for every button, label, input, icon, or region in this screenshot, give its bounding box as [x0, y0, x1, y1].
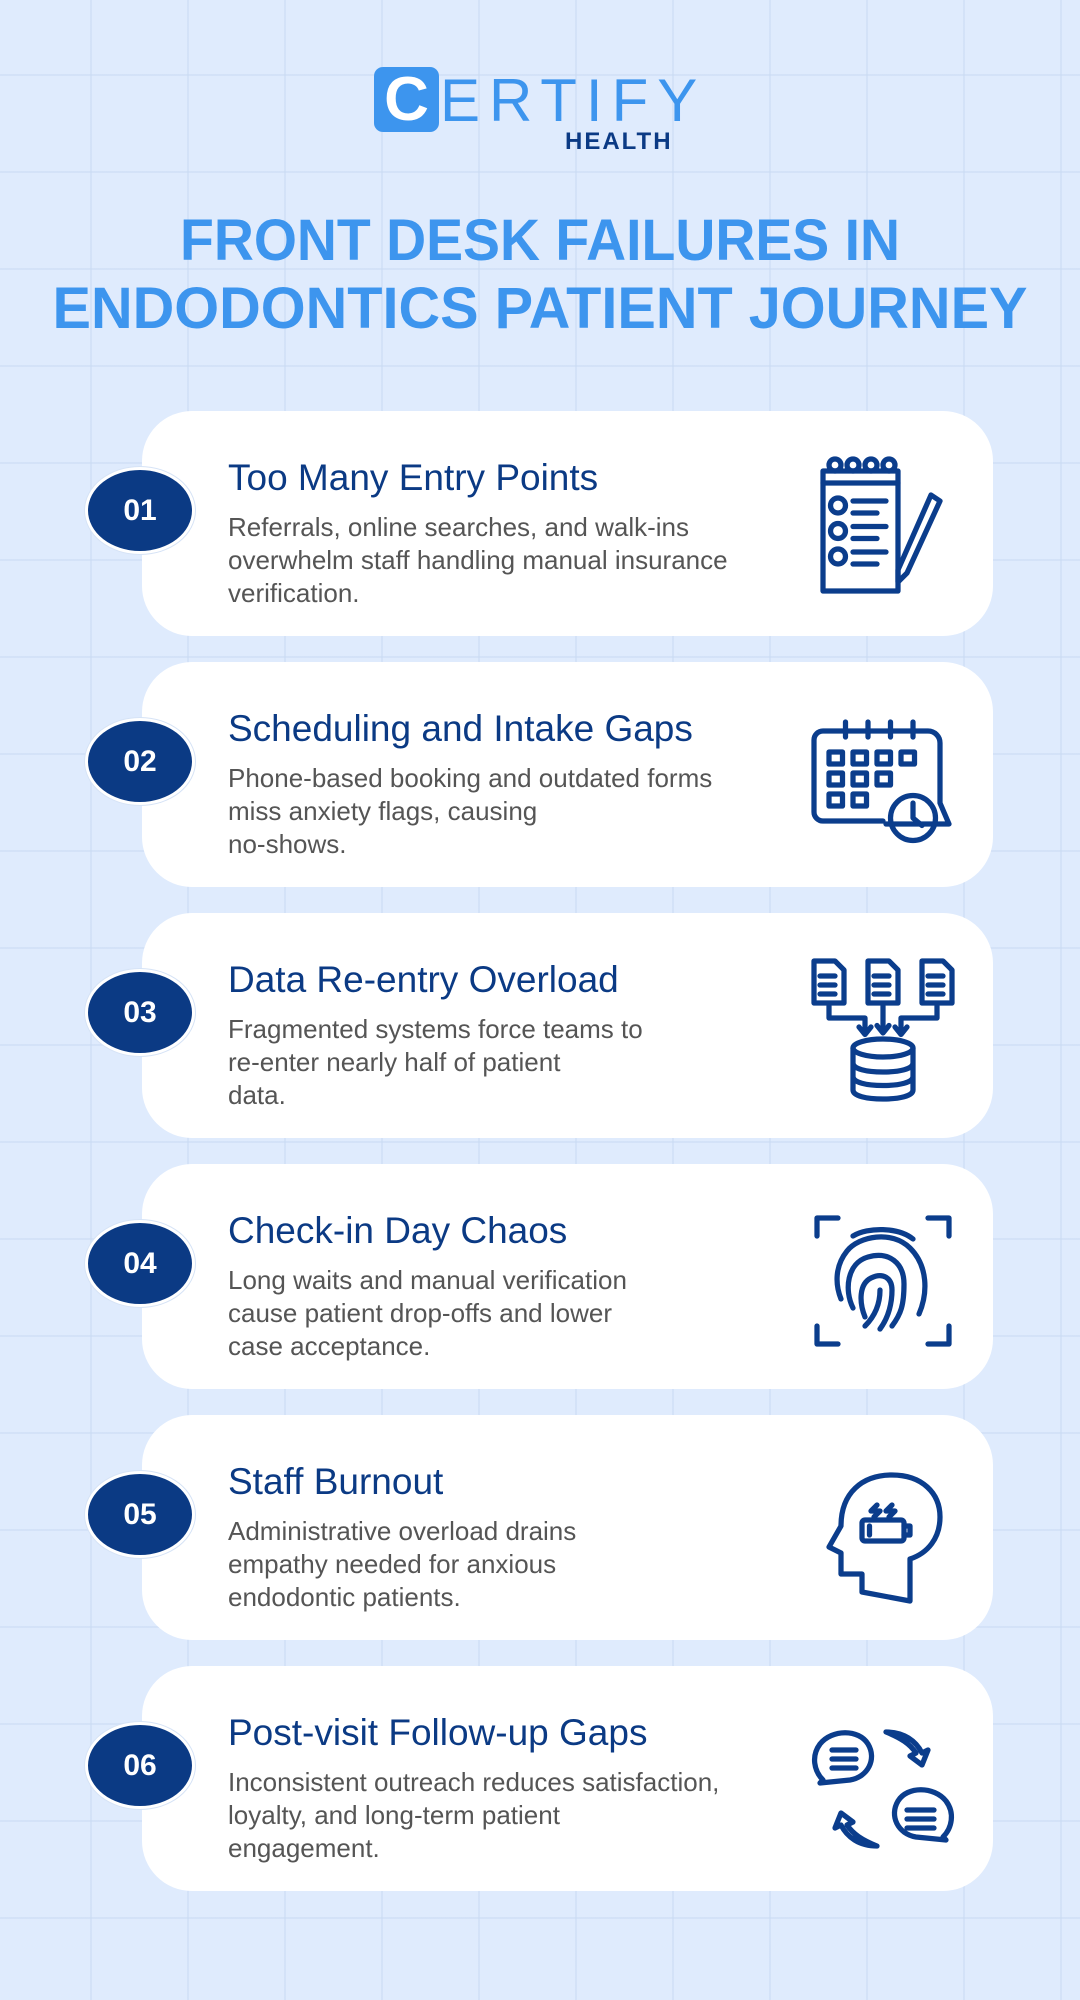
panel: 03 — [142, 913, 993, 1138]
text: data. — [228, 1080, 286, 1110]
number badge: 01 — [123, 494, 157, 527]
panel: 01 — [142, 411, 993, 636]
text: Long waits and manual verification — [228, 1265, 627, 1295]
icon: database — [811, 958, 955, 1102]
icon: calendar — [811, 719, 952, 844]
text: overwhelm staff handling manual insurance — [228, 545, 728, 575]
icon: checklist — [820, 456, 943, 594]
heading: Scheduling and Intake Gaps — [228, 708, 693, 749]
heading: Check-in Day Chaos — [228, 1210, 567, 1251]
number badge — [85, 1220, 195, 1307]
text — [228, 1767, 719, 1863]
panel: 02 — [142, 662, 993, 887]
panel: 06 — [142, 1666, 993, 1891]
panel: 05 — [142, 1415, 993, 1640]
text: verification. — [228, 578, 360, 608]
icon: chat exchange — [812, 1729, 954, 1849]
logo mark: C — [384, 65, 429, 134]
text: miss anxiety flags, causing — [228, 796, 537, 826]
heading: Post-visit Follow-up Gaps — [228, 1712, 647, 1753]
logo subtext: HEALTH — [565, 128, 673, 155]
title: FRONT DESK FAILURES IN — [180, 208, 900, 273]
text: Inconsistent outreach reduces satisfaction, — [228, 1767, 719, 1797]
panel: 04 — [142, 1164, 993, 1389]
text: Phone-based booking and outdated forms — [228, 763, 712, 793]
text: cause patient drop-offs and lower — [228, 1298, 612, 1328]
text — [228, 512, 728, 608]
number badge: 04 — [123, 1247, 157, 1280]
heading: Data Re-entry Overload — [228, 959, 619, 1000]
text: Referrals, online searches, and walk-ins — [228, 512, 689, 542]
number badge: 05 — [123, 1498, 157, 1531]
text: loyalty, and long-term patient — [228, 1800, 560, 1830]
heading: Staff Burnout — [228, 1461, 443, 1502]
number badge — [85, 1722, 195, 1809]
number badge — [85, 1471, 195, 1558]
text: Fragmented systems force teams to — [228, 1014, 643, 1044]
text — [228, 1014, 643, 1110]
number badge — [85, 718, 195, 805]
text: case acceptance. — [228, 1331, 430, 1361]
icon: head with battery — [826, 1472, 943, 1604]
text — [228, 1265, 627, 1361]
title: ENDODONTICS PATIENT JOURNEY — [52, 276, 1028, 340]
heading: Too Many Entry Points — [228, 457, 598, 498]
number badge — [85, 467, 195, 554]
text: engagement. — [228, 1833, 380, 1863]
number badge: 06 — [123, 1749, 157, 1782]
logo — [374, 65, 706, 155]
text — [228, 1516, 576, 1612]
title — [52, 208, 1028, 340]
text: Administrative overload drains — [228, 1516, 576, 1546]
icon: fingerprint — [814, 1215, 952, 1347]
text: re-enter nearly half of patient — [228, 1047, 560, 1077]
number badge: 03 — [123, 996, 157, 1029]
text: no-shows. — [228, 829, 346, 859]
number badge: 02 — [123, 745, 157, 778]
number badge — [85, 969, 195, 1056]
text: endodontic patients. — [228, 1582, 461, 1612]
text — [228, 763, 712, 859]
logo wordmark: ERTIFY — [440, 67, 706, 134]
logo mark — [374, 67, 439, 132]
text: empathy needed for anxious — [228, 1549, 556, 1579]
